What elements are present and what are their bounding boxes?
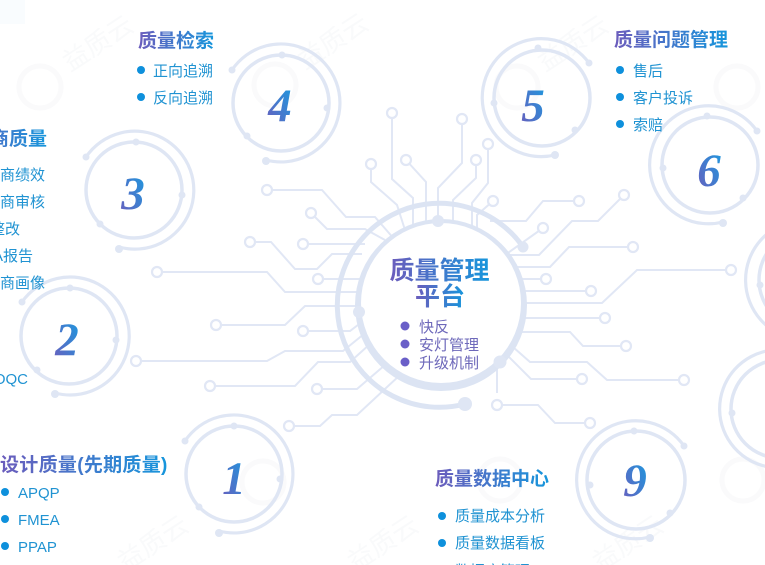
circuit traces <box>131 108 736 431</box>
watermarks: 益质云 <box>292 7 374 75</box>
ring 2: 2 <box>54 314 79 366</box>
ring 9: 9 <box>623 455 647 507</box>
ring 3: 3 <box>120 168 145 220</box>
panel: 质量问题管理 <box>614 28 728 134</box>
panel: 供应商质量 <box>0 127 47 292</box>
central list: 安灯管理 <box>419 337 479 354</box>
panel: 质量检索: 质量检索 <box>138 29 214 52</box>
ring 9 <box>577 421 688 542</box>
panel: 质量数据中心 <box>435 467 549 565</box>
panel: 质量问题管理: 质量问题管理 <box>614 28 728 51</box>
panel: 质量数据中心: 质量数据中心 <box>435 467 549 490</box>
panel: 设计质量: FMEA <box>18 512 60 529</box>
ring 4: 4 <box>267 80 292 132</box>
ring 3 <box>82 131 194 253</box>
ring 5 <box>482 39 592 159</box>
watermarks: 益质云 <box>532 9 614 77</box>
panel: 质量数据中心: 质量数据看板 <box>455 534 545 552</box>
watermarks: 益质云 <box>57 9 139 77</box>
central title: 质量管理 <box>389 257 490 285</box>
ring 7 <box>746 220 765 340</box>
central platform ring <box>337 203 528 411</box>
panel: 设计质量: PPAP <box>18 539 57 556</box>
central list <box>400 319 479 372</box>
panel: 质量检索 <box>137 29 214 107</box>
ring 1: 1 <box>222 453 246 505</box>
central list: 快反 <box>419 319 449 336</box>
ring 4 <box>228 44 340 165</box>
central title: 平台 <box>415 282 465 311</box>
panel: 质量数据中心: 质量成本分析 <box>455 508 545 525</box>
ring 2 <box>18 277 129 398</box>
central title <box>389 257 490 311</box>
ring 6: 6 <box>697 145 721 197</box>
ring 5: 5 <box>521 80 545 132</box>
panel: 质量问题管理: 客户投诉 <box>633 90 693 107</box>
panel: 质量问题管理: 售后 <box>633 63 663 80</box>
panel: 设计质量 <box>0 453 168 556</box>
panel: 设计质量: APQP <box>18 485 60 502</box>
ring 8 <box>720 350 765 468</box>
panel: 质量检索: 反向追溯 <box>153 90 213 107</box>
panel: 质量检索: 正向追溯 <box>153 63 213 80</box>
central list: 升级机制 <box>419 355 479 372</box>
ring 6 <box>650 106 760 227</box>
panel: 设计质量: 设计质量(先期质量) <box>0 453 168 476</box>
panel: 质量问题管理: 索赔 <box>633 117 663 134</box>
ring 1 <box>182 415 293 537</box>
